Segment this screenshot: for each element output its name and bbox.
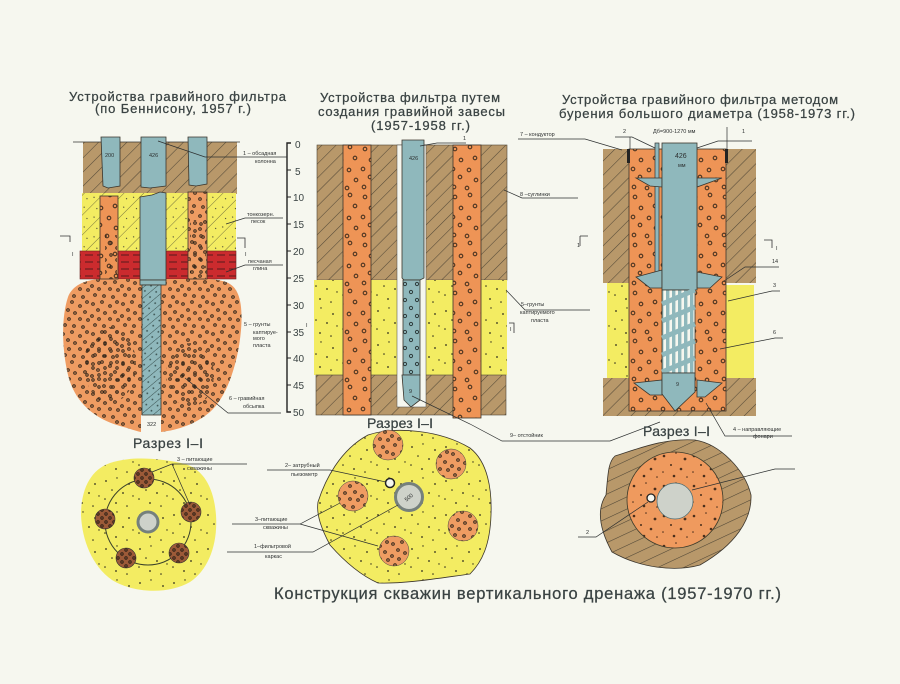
labels and leaders: каптируе- <box>253 330 278 336</box>
labels and leaders: пьезометр <box>291 472 318 478</box>
section marks: I <box>72 252 74 258</box>
feeding wells label: скважины <box>187 466 212 472</box>
conductor casing marks <box>627 143 728 282</box>
piezometer <box>647 494 655 502</box>
feeding wells <box>338 430 478 566</box>
labels and leaders: 8 –суглинки <box>520 192 550 198</box>
labels and leaders: каптируемого <box>520 310 555 316</box>
centre pipe, centralisers and sump: мм <box>678 163 686 169</box>
feeding wells label: 3 – питающие <box>177 457 213 463</box>
labels and leaders: каркас <box>265 554 282 560</box>
labels and leaders: фонари <box>753 434 773 440</box>
feeding gravel columns <box>100 192 207 279</box>
panel: gravel curtain filter <box>314 90 660 441</box>
labels and leaders: 1 <box>742 129 745 135</box>
labels and leaders: 1–фильтровой <box>254 543 291 550</box>
depth scale: 50 <box>293 408 305 419</box>
panel: section I-I, large diameter <box>578 423 795 568</box>
labels and leaders: пласта <box>253 343 271 349</box>
section title right: Разрез I–I <box>643 423 710 439</box>
section title middle: Разрез I–I <box>367 415 433 431</box>
heading: Bennison filter: Устройства гравийного фильтра <box>69 89 287 104</box>
central well and piezometer: 500 <box>404 493 415 503</box>
labels and leaders: 5–грунты <box>521 302 544 308</box>
gravel curtain columns <box>343 145 481 418</box>
labels and leaders <box>578 469 795 537</box>
gravel ring <box>627 452 723 548</box>
panel: Bennison gravel filter <box>60 89 308 432</box>
heading: large-diameter drilling: бурения большого диаметра (1958-1973 гг.) <box>559 106 855 121</box>
depth scale: 40 <box>293 354 305 365</box>
yellow sand blob <box>318 430 491 583</box>
labels and leaders: глина <box>253 266 268 272</box>
labels and leaders: пласта <box>531 318 549 324</box>
labels and leaders: 4 – направляющие <box>733 427 781 433</box>
depth scale <box>287 140 305 419</box>
section title left: Разрез I–I <box>133 435 203 451</box>
heading: gravel curtain <box>318 90 505 133</box>
casing pipes: 426 <box>149 153 158 159</box>
labels and leaders: 14 <box>772 259 778 265</box>
labels and leaders: 5 – грунты <box>244 322 270 328</box>
labels and leaders: 1 <box>463 136 466 142</box>
labels and leaders <box>227 462 398 560</box>
labels and leaders: I <box>776 246 778 252</box>
labels and leaders: 6 – гравийная <box>229 395 264 402</box>
soil layers <box>314 145 507 415</box>
labels and leaders: 3 <box>773 283 776 289</box>
labels and leaders: 9– отстойник <box>510 432 543 439</box>
depth scale: 45 <box>293 381 305 392</box>
section marks: I <box>245 252 247 258</box>
depth scale: 15 <box>293 220 305 231</box>
labels and leaders: 1 <box>577 243 580 249</box>
depth scale: 0 <box>295 140 301 151</box>
labels and leaders <box>518 127 792 440</box>
labels and leaders: мого <box>253 336 265 342</box>
heading: gravel curtain: Устройства фильтра путем <box>320 90 500 105</box>
labels and leaders: 7 – кондуктор <box>520 132 555 138</box>
heading: gravel curtain: создания гравийной завесы <box>318 104 505 119</box>
gravel envelope <box>63 279 242 432</box>
casing pipes: 200 <box>105 153 114 159</box>
central well and piezometer <box>386 478 422 510</box>
panel: section I-I, gravel curtain <box>227 415 491 583</box>
labels and leaders: обсыпка <box>243 404 265 410</box>
centre pipe, centralisers and sump <box>634 143 722 411</box>
labels and leaders: 2– затрубный <box>285 462 320 469</box>
centre pipe, centralisers and sump: 9 <box>676 382 679 388</box>
labels and leaders: 2 <box>586 530 589 536</box>
heading: large-diameter drilling <box>559 92 855 121</box>
bore and pipe: 426 <box>409 156 418 162</box>
feeding wells label <box>152 457 247 505</box>
labels and leaders <box>158 141 287 413</box>
labels and leaders: песок <box>251 219 266 225</box>
hatched soil blob <box>600 440 751 568</box>
heading: gravel curtain: (1957-1958 гг.) <box>371 118 470 133</box>
section marks: I <box>306 323 308 329</box>
labels and leaders: колонна <box>255 159 277 165</box>
heading: Bennison filter <box>69 89 287 116</box>
labels and leaders: скважины <box>263 525 288 531</box>
depth scale: 30 <box>293 301 305 312</box>
bore and pipe <box>397 140 426 407</box>
labels and leaders <box>412 136 660 441</box>
casing pipes: 322 <box>147 422 156 428</box>
depth scale: 25 <box>293 274 305 285</box>
panel: large-diameter drilling filter <box>518 92 855 440</box>
depth scale: 10 <box>293 193 305 204</box>
centre pipe, centralisers and sump: 426 <box>675 153 687 160</box>
central well <box>138 512 158 532</box>
depth scale: 35 <box>293 328 305 339</box>
labels and leaders: Дб=900-1270 мм <box>653 129 696 135</box>
bore and pipe: 9 <box>409 389 412 395</box>
main caption: Конструкция скважин вертикального дренажа (1957-1970 гг.) <box>274 585 781 603</box>
depth scale: 5 <box>295 167 301 178</box>
labels and leaders: песчаная <box>248 259 272 265</box>
soil cross-section layers <box>73 142 240 279</box>
labels and leaders: 3–питающие <box>255 517 287 523</box>
section marks <box>60 236 308 329</box>
soil layers <box>603 149 756 416</box>
heading: Bennison filter: (по Беннисону, 1957 г.) <box>95 101 251 116</box>
labels and leaders: 2 <box>623 129 626 135</box>
central well <box>657 483 693 519</box>
ring of feeding wells <box>95 468 201 568</box>
labels and leaders: тонкозерн. <box>247 212 275 218</box>
labels and leaders: I <box>510 327 512 333</box>
gravel fill <box>629 149 726 411</box>
panel: section I-I, Bennison <box>81 435 247 591</box>
depth scale: 20 <box>293 247 305 258</box>
yellow sand blob <box>81 459 216 591</box>
heading: large-diameter drilling: Устройства гравийного фильтра методом <box>562 92 838 107</box>
labels and leaders: 6 <box>773 330 776 336</box>
casing pipes <box>101 137 207 428</box>
labels and leaders: 1 – обсадная <box>243 151 276 157</box>
